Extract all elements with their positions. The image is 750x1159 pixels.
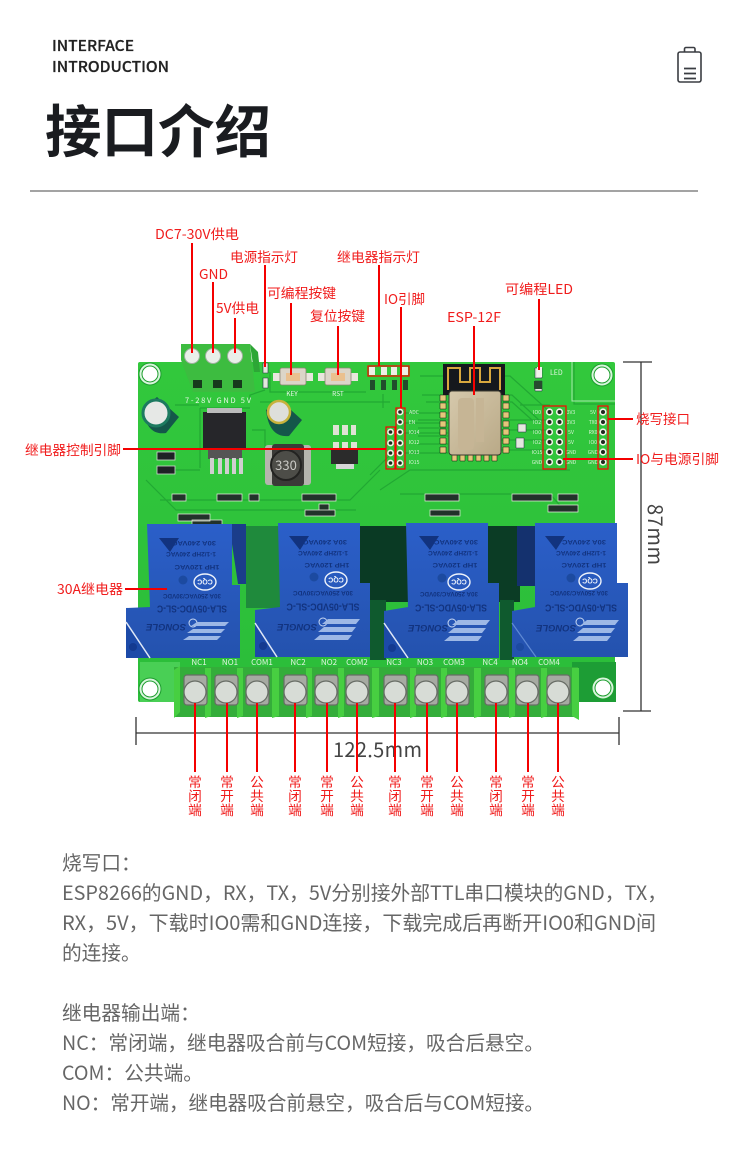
pin silk labels: IO2 (533, 439, 541, 446)
terminal callouts: 开 (420, 785, 434, 805)
dimension: 122.5mm (136, 717, 619, 763)
terminal callouts: 常 (420, 771, 434, 791)
inductor 330: 330 (275, 455, 297, 474)
terminal callouts: 闭 (388, 785, 402, 805)
terminal callouts: 闭 (288, 785, 302, 805)
terminal callouts: 端 (350, 799, 364, 819)
relay 4: SLA-05VDC-SL-C (545, 602, 617, 614)
relay 1: SONGLE (145, 622, 186, 632)
relay 3: 1-1/2HP 240VAC (427, 549, 478, 555)
terminal callouts: 开 (320, 785, 334, 805)
callout: relay LEDs: 继电器指示灯 (337, 246, 420, 266)
terminal callouts: 开 (521, 785, 535, 805)
relay 3: 1HP 120VAC (432, 561, 478, 567)
callout: ESP-12F: ESP-12F (447, 306, 501, 326)
relay 2: 1HP 120VAC (304, 561, 350, 567)
relay 3: 30A 250VAC/30VDC (419, 590, 478, 596)
pin silk labels: 5V (568, 439, 574, 446)
pcb base (138, 362, 615, 702)
terminal silk labels: NO4 (512, 657, 529, 668)
callout: power LED (230, 246, 298, 367)
text block: relay output: NO：常开端，继电器吸合前悬空，吸合后与COM短接。 (62, 1087, 544, 1116)
terminal callouts: 闭 (489, 785, 503, 805)
terminal callouts: 公 (350, 771, 364, 791)
mounting holes (139, 363, 614, 700)
relay 2: 30A 250VAC/30VDC (292, 589, 353, 595)
relay 4: SONGLE (535, 623, 576, 633)
callout: programmable LED: 可编程LED (505, 278, 573, 298)
terminal callouts: 端 (521, 799, 535, 819)
relay 1: SLA-05VDC-SL-C (157, 602, 227, 614)
relay 1 (126, 524, 246, 658)
relay 4: 30A 250VAC/30VDC (549, 589, 608, 595)
callout: 30A relay (57, 578, 167, 598)
terminal callouts: 常 (521, 771, 535, 791)
silkscreen: power input label: 7-28V GND 5V (185, 395, 252, 406)
terminal silk labels: COM3 (443, 657, 465, 668)
programmable LED: LED (550, 368, 563, 378)
pin silk labels: 3V3 (567, 419, 575, 426)
terminal callouts: 常 (489, 771, 503, 791)
relay 2: SLA-05VDC-SL-C (286, 600, 360, 612)
terminal callouts: 常 (288, 771, 302, 791)
callout: programmable button: 可编程按键 (267, 282, 336, 302)
relay 1: 30A 250VAC/30VDC (162, 592, 221, 598)
terminal callouts: 端 (220, 799, 234, 819)
programmable LED (534, 367, 563, 389)
callout: 5V: 5V供电 (216, 297, 259, 317)
terminal callouts: 共 (250, 785, 264, 805)
relay 1: 30A 240VAC (171, 539, 216, 545)
output terminal block (174, 657, 579, 720)
callout: flash port (598, 406, 690, 469)
terminal fins (174, 666, 579, 720)
callout: relay LEDs (337, 246, 420, 376)
relay 3: 30A 240VAC (433, 538, 478, 544)
callout: power LED: 电源指示灯 (230, 246, 298, 266)
pin silk labels: IO2 (533, 419, 541, 426)
text block: relay output: COM：公共端。 (62, 1057, 203, 1086)
flash header pins (600, 409, 606, 465)
relay 3: CQC (451, 578, 467, 584)
callout: GND: GND (199, 263, 228, 283)
terminal screws (184, 675, 570, 705)
electrolytic capacitor left (143, 397, 179, 433)
callout: IO pins (384, 288, 425, 469)
pin silk labels: GND (588, 459, 599, 466)
callout: IO pins: IO引脚 (384, 288, 425, 308)
relay 3: SLA-05VDC-SL-C (415, 602, 487, 614)
pin silk labels: GND (566, 459, 577, 466)
header: English subtitle: INTERFACE (52, 35, 134, 56)
IO and power header pins (547, 409, 562, 465)
relay 4: 30A 240VAC (561, 538, 606, 544)
relay 4: 1HP 120VAC (561, 561, 606, 567)
pin silk labels: EN (409, 419, 416, 426)
callout: ESP-12F (447, 306, 501, 395)
pin silk labels (409, 409, 599, 466)
pcb traces (140, 362, 615, 652)
header: English subtitle (52, 35, 169, 77)
pin silk labels: IO0 (533, 429, 541, 436)
pin silk labels: IO14 (409, 429, 420, 436)
callout: IO and power pins (543, 406, 719, 469)
button RST (318, 368, 358, 398)
text block: flash port: RX，5V，下载时IO0需和GND连接，下载完成后再断开IO0和GND间 (62, 907, 656, 936)
callout: DC input: DC7-30V供电 (155, 223, 239, 243)
diodes (157, 452, 175, 474)
callout: programmable LED (505, 278, 573, 370)
terminal callouts: 端 (288, 799, 302, 819)
callout: reset button (310, 305, 365, 375)
icon: battery clipboard (678, 48, 701, 82)
terminal callouts: 端 (250, 799, 264, 819)
terminal silk labels: NC1 (191, 657, 207, 668)
terminal callouts: 端 (450, 799, 464, 819)
pin silk labels: 3V3 (567, 409, 575, 416)
terminal callouts (188, 703, 565, 819)
header: English subtitle: INTRODUCTION (52, 56, 169, 77)
silk outline corner (572, 362, 615, 401)
callout: GND (199, 263, 228, 353)
pin silk labels: 5V (568, 429, 574, 436)
callout: programmable button (267, 282, 336, 375)
terminal silk labels: NO3 (417, 657, 433, 668)
text block: flash port: ESP8266的GND，RX，TX，5V分别接外部TTL串口模块的GND，TX， (62, 877, 667, 906)
terminal callouts: 公 (551, 771, 565, 791)
terminal callouts: 公 (250, 771, 264, 791)
button KEY (273, 368, 313, 398)
pin silk labels: GND (588, 449, 599, 456)
pin silk labels: IO12 (409, 439, 420, 446)
power terminal block (181, 344, 260, 392)
pin silk labels: IO15 (532, 449, 543, 456)
relay 1: 1-1/2HP 240VAC (165, 550, 216, 556)
dimension: 87mm (623, 362, 671, 711)
terminal silk labels: COM4 (538, 657, 560, 668)
terminal silk labels: NC3 (386, 657, 402, 668)
terminal callouts: 端 (388, 799, 402, 819)
callout: 5V (216, 297, 259, 353)
text block: relay output: NC：常闭端，继电器吸合前与COM短接，吸合后悬空。 (62, 1027, 544, 1056)
pin silk labels: IO0 (533, 409, 541, 416)
button KEY: KEY (286, 388, 298, 398)
relay 1: CQC (197, 578, 213, 584)
pin silk labels: IO13 (409, 449, 420, 456)
dimension: 122.5mm: 122.5mm (333, 734, 422, 763)
text block: relay output: 继电器输出端： (62, 997, 200, 1026)
callout: relay control pins: 继电器控制引脚 (25, 439, 121, 459)
circuit board (126, 344, 628, 720)
text block: relay output (62, 997, 544, 1116)
terminal silk labels: COM1 (251, 657, 273, 668)
relay 1: 1HP 120VAC (174, 563, 220, 569)
terminal callouts: 闭 (188, 785, 202, 805)
terminal silk labels: NC2 (290, 657, 306, 668)
button RST: RST (332, 388, 344, 398)
terminal base (174, 667, 578, 717)
relay 2: 30A 240VAC (302, 538, 347, 544)
pin silk labels: GND (532, 459, 543, 466)
text block: flash port: 烧写口： (62, 847, 141, 876)
pin silk labels: IO15 (409, 459, 420, 466)
relay control header pins (388, 429, 393, 466)
title: 接口介绍 (45, 87, 271, 169)
callout: relay control pins (25, 427, 395, 469)
terminal callouts: 常 (320, 771, 334, 791)
terminal callouts: 常 (188, 771, 202, 791)
relay 2: SONGLE (276, 622, 317, 632)
terminal callouts: 端 (489, 799, 503, 819)
relay 2: 1-1/2HP 240VAC (297, 549, 348, 555)
dark zones between relays (246, 526, 280, 608)
relay 4: CQC (582, 576, 598, 584)
callout: flash port: 烧写接口 (636, 408, 690, 428)
pin silk labels: 5V (590, 409, 596, 416)
IO pin header (397, 409, 403, 466)
terminal silk labels: COM2 (346, 657, 368, 668)
pin silk labels: TX0 (589, 419, 597, 426)
pin silk labels: GND (566, 449, 577, 456)
pin silk labels: IO0 (589, 439, 597, 446)
pin silk labels: RX0 (589, 429, 598, 436)
terminal callouts: 共 (551, 785, 565, 805)
inductor 330 (265, 444, 311, 486)
terminal callouts: 常 (388, 771, 402, 791)
terminal silk labels (191, 657, 560, 668)
dimension: 87mm: 87mm (642, 504, 671, 565)
terminal callouts: 端 (551, 799, 565, 819)
terminal callouts: 共 (350, 785, 364, 805)
relay 3: SONGLE (407, 623, 448, 633)
terminal silk labels: NO1 (222, 657, 238, 668)
terminal callouts: 公 (450, 771, 464, 791)
terminal silk labels: NC4 (482, 657, 498, 668)
regulator chip U3 (203, 408, 246, 474)
text block: flash port (62, 847, 667, 966)
terminal callouts: 端 (188, 799, 202, 819)
electrolytic capacitor right (266, 400, 302, 436)
terminal callouts: 开 (220, 785, 234, 805)
callout: reset button: 复位按键 (310, 305, 365, 325)
callout: IO and power pins: IO与电源引脚 (636, 448, 719, 468)
ESP-12F wifi module (440, 364, 509, 461)
terminal callouts: 常 (220, 771, 234, 791)
small SMD parts (172, 363, 578, 526)
terminal silk labels: NO2 (321, 657, 338, 668)
text block: flash port: 的连接。 (62, 937, 141, 966)
terminal callouts: 端 (420, 799, 434, 819)
callout: DC input (155, 223, 239, 353)
terminal callouts: 共 (450, 785, 464, 805)
pin silk labels: ADC (409, 409, 419, 416)
relay 4 (512, 523, 628, 657)
relay 2: CQC (328, 576, 344, 582)
terminal callouts: 端 (320, 799, 334, 819)
relay 3 (384, 523, 499, 658)
relay 4: 1-1/2HP 240VAC (555, 549, 606, 555)
relay 2 (255, 523, 370, 657)
callout: 30A relay: 30A继电器 (57, 578, 123, 598)
